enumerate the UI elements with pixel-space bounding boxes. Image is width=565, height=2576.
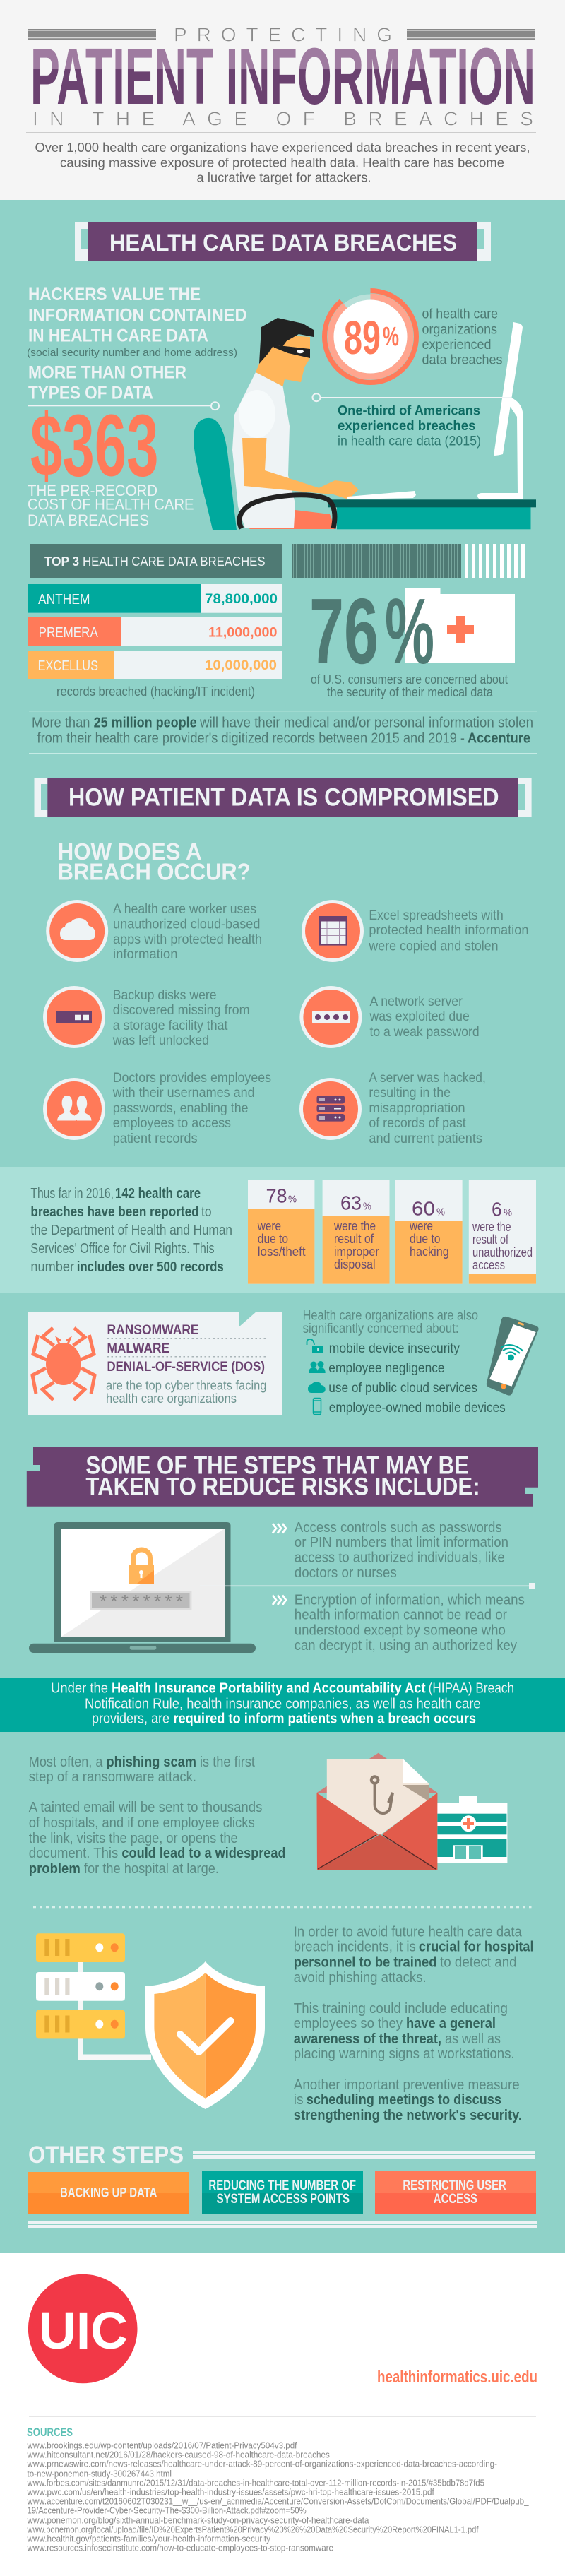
text: of health care organizations: data breaches [422,352,503,368]
text: phishing scam: of hospitals, and if one employee clicks [29,1815,255,1831]
title: protecting [28,23,535,45]
pants [249,510,335,529]
text: 142 breaches: number [30,1259,74,1275]
subheading: how does a breach occur: BREACH OCCUR? [58,858,251,884]
breach item: server hacked: A server was hacked, [369,1070,486,1086]
banner: hipaa: (HIPAA) Breach [429,1681,514,1697]
icon: chevrons [273,1595,286,1605]
stat: $363: $363 [30,397,158,494]
text: phishing scam: the link, visits the page, or opens the [29,1831,238,1846]
sources: www.pwc.com/us/en/health-industries/top-health-industry-issues/assets/pwc-hri-top-healthcare-issues-2015.pdf [27,2487,434,2498]
breach item: cloud apps: apps with protected health [113,932,262,947]
text: access controls: doctors or nurses [295,1565,397,1581]
text: one-third of americans: One-third of Americans [338,403,480,418]
subheading: how does a breach occur [58,838,251,884]
step box: reducing access points: REDUCING THE NUMBER OF [208,2178,356,2193]
breach item: shared credentials: employees to access [113,1115,231,1131]
bar: 63%: disposal [334,1257,376,1271]
hackers text block: MORE THAN OTHER [28,363,186,383]
intro text: Over 1,000 health care organizations have experienced data breaches in recent years, [35,140,530,155]
bar: 60%: % [436,1206,445,1218]
text: phishing scam: is the first [200,1755,255,1770]
step box: reducing access points [202,2171,363,2214]
panel: cyber threats: health care organizations [106,1391,237,1406]
icon: server stack [316,1096,345,1122]
breach item: backup disks: a storage facility that [113,1018,228,1033]
stat: $363: THE PER-RECORD [28,482,157,499]
icon: spreadsheet [319,916,347,946]
breach item: weak password [299,986,480,1048]
hackers text block: HACKERS VALUE THE [28,285,201,304]
breach item: shared credentials: Doctors provides employees [113,1070,271,1086]
row: anthem: ANTHEM [38,592,90,607]
breach item: cloud apps [46,900,262,962]
icon: password field [312,1011,350,1023]
bar: 63%: % [363,1201,371,1213]
sources: www.hitconsultant.net/2016/01/28/hackers-caused-98-of-healthcare-data-breaches [27,2450,330,2460]
accenture statement: will have their medical and/or personal information stolen [199,715,533,730]
title: protecting: PROTECTING [174,23,392,45]
banner: hipaa: Under the [51,1681,108,1697]
row: anthem: 78,800,000 [205,592,278,607]
text: training: strengthening the network's security. [294,2108,522,2123]
bar: 78% [248,1180,314,1284]
text: access controls: or PIN numbers that limit information [295,1535,509,1550]
text: 142 breaches: Services' Office for Civil Rights. This [30,1241,215,1257]
hair [259,318,314,364]
stat: $363: DATA BREACHES [28,511,149,529]
step box: backing up data: BACKING UP DATA [60,2186,157,2201]
icon: chevrons [273,1524,286,1533]
text: 142 breaches: 142 health care [115,1186,201,1201]
text: phishing scam [29,1755,286,1877]
bar: 63% [323,1180,390,1284]
breach item: server hacked: misappropriation [369,1100,465,1116]
table header: TOP 3 [44,554,79,569]
step box: reducing access points: SYSTEM ACCESS POINTS [217,2192,350,2207]
sources: www.ponemon.org/blog/sixth-annual-benchmark-study-on-privacy-security-of-healthcare-data [27,2515,369,2526]
stat: 76% with medical folder [309,579,515,699]
server unit [36,1972,125,2001]
text: training: have a general [406,2016,496,2031]
text: 142 breaches: Thus far in 2016, [30,1186,114,1201]
row: excellus: EXCELLUS [38,658,98,674]
letter [327,1759,429,1835]
sources [27,2426,529,2553]
text: phishing scam: for the hospital at large. [84,1861,219,1877]
icon: smartphone wifi [487,1317,539,1396]
panel: organization concerns: Health care organizations are also [303,1308,478,1323]
text: training: awareness of the threat, [294,2031,441,2047]
heading: other steps: OTHER STEPS [28,2142,184,2168]
banner: hipaa: required to inform patients when a breach occurs [173,1711,476,1727]
bar: 60%: 60 [412,1197,435,1219]
text: training: to detect and [440,1955,517,1971]
icon: spider [32,1328,95,1400]
panel: 2016 breach statistics [0,1167,565,1293]
step box: backing up data [28,2172,189,2214]
breach item: weak password: to a weak password [370,1024,480,1040]
table header [30,544,282,578]
panel: organization concerns [303,1308,539,1415]
stripe bar [292,544,525,578]
hackers text block: (social security number and home address) [27,347,237,359]
bar: 60%: due to [410,1232,441,1246]
stat: $363 [28,397,194,529]
stat: 76% with medical folder: % [385,579,434,683]
breach item: backup disks: was left unlocked [112,1033,209,1048]
banner: hipaa: providers, are [92,1711,170,1727]
bar: 60%: hacking [410,1245,449,1259]
banner: hipaa [0,1678,565,1732]
text: access controls: access to authorized individuals, like [295,1550,505,1566]
mask [272,345,310,358]
bar: 60%: were [409,1219,433,1233]
text: of health care organizations [422,307,503,368]
sleeve highlight [239,390,275,438]
bar: 78%: loss/theft [258,1245,306,1259]
text: phishing scam: problem [29,1861,81,1877]
heading: other steps [28,2142,535,2168]
panel: organization concerns: mobile device insecurity [329,1341,460,1356]
breach item: shared credentials: patient records [113,1131,198,1146]
row: excellus: 10,000,000 [205,658,277,673]
banner: hipaa: Health Insurance Portability and Accountability Act [112,1681,426,1697]
footer: uic logo [28,2274,137,2383]
bar: 6%: 6 [492,1199,502,1221]
text: 142 breaches: includes over 500 records [77,1259,224,1275]
icon: mobile small [314,1399,321,1414]
bar: 6%: result of [472,1233,509,1247]
torso [232,372,295,528]
icon: padlock [129,1550,154,1584]
text: encryption: can decrypt it, using an authorized key [295,1638,517,1654]
icon: open lock [307,1339,323,1353]
panel: cyber threats: are the top cyber threats facing [106,1377,267,1392]
bar: 6%: % [504,1207,512,1219]
text: training: crucial for hospital [419,1940,534,1955]
text: training: placing warning signs at workstations. [294,2046,515,2062]
server unit [36,2010,125,2038]
breach item: backup disks: Backup disks were [113,987,217,1003]
hackers text block: TYPES OF DATA [28,384,153,403]
text: training: This training could include educating [294,2001,508,2017]
text: 142 breaches: to [201,1204,212,1220]
breach item: weak password: A network server [370,994,463,1009]
breach item: shared credentials: passwords, enabling the [113,1100,249,1116]
text: phishing scam: step of a ransomware attack. [29,1769,196,1785]
text: 142 breaches: breaches have been reported [30,1204,199,1220]
icon: disk [56,1011,92,1023]
bar: 78%: were [257,1219,281,1233]
icon: hook [371,1776,393,1813]
table note: records breached (hacking/IT incident) [56,684,255,699]
row: premera: 11,000,000 [208,625,277,640]
text: training: Another important preventive measure [294,2077,520,2093]
text: training: breach incidents, it is [294,1940,416,1955]
hackers text block: INFORMATION CONTAINED [28,305,247,325]
title: in the age of breaches: IN THE AGE OF BREACHES [32,107,533,129]
text: phishing scam: Most often, a [29,1755,103,1770]
heading: how patient data is compromised [34,778,532,817]
bar: 78%: 78 [266,1185,287,1207]
panel: cyber threats: RANSOMWARE [107,1323,199,1338]
bar: 63%: result of [334,1232,374,1246]
intro text [35,140,530,185]
bar: 6%: unauthorized [472,1245,533,1259]
breach item: weak password: was exploited due [369,1009,470,1024]
face [256,336,310,386]
callout connector left [28,402,219,410]
table header: HEALTH CARE DATA BREACHES [83,554,266,569]
breach item: server hacked: and current patients [369,1131,482,1146]
sources: www.ponemon.org/local/upload/file/ID%20ExpertsPatient%20Privacy%20%26%20Data%20Security%20Report%20FINAL1-1.pdf [27,2524,479,2535]
text: training [294,1925,534,2123]
breach item: shared credentials [43,1070,271,1146]
envelope [316,1793,437,1870]
sources: www.forbes.com/sites/danmunro/2015/12/31/data-breaches-in-healthcare-total-over-112-million-records-in-2015/#35bdb78d7fd5 [27,2478,484,2488]
hackers text block: IN HEALTH CARE DATA [28,326,208,346]
panel: organization concerns: use of public cloud services [328,1381,477,1396]
breach item: excel spreadsheets: Excel spreadsheets with [369,908,504,923]
illustration: hacker at computer [194,318,536,530]
intro text: a lucrative target for attackers. [196,170,371,185]
icon: shield [145,1961,265,2109]
text: training: as well as [445,2031,501,2047]
icon: medical folder [405,588,515,663]
heading: steps to reduce risks: SOME OF THE STEPS THAT MAY BE [85,1452,469,1480]
text: one-third of americans: in health care data (2015) [338,434,481,449]
heading: health care data breaches: HEALTH CARE DATA BREACHES [109,230,457,256]
breach item: cloud apps: information [113,946,178,962]
text: 142 breaches: the Department of Health and Human [30,1223,232,1238]
heading: health care data breaches [75,222,491,261]
panel: cyber threats: DENIAL-OF-SERVICE (DOS) [107,1360,265,1375]
text: one-third of americans [338,403,481,449]
panel: cyber threats [28,1312,282,1415]
text: phishing scam: phishing scam [106,1755,196,1770]
text: training: scheduling meetings to discuss [307,2092,501,2108]
text: one-third of americans: experienced breaches [338,418,476,434]
bar: 6%: were the [472,1220,511,1234]
text: of health care organizations: experienced [422,337,492,352]
monitor [477,322,523,499]
sources: to-new-ponemon-study-300267443.html [27,2469,172,2479]
breach item: excel spreadsheets: were copied and stolen [368,938,499,954]
text: training: personnel to be trained [294,1955,436,1971]
step box: restricting user access: ACCESS [434,2192,477,2207]
accenture statement: 25 million people [94,715,197,730]
breach item: server hacked: of records of past [369,1115,466,1131]
row: premera: PREMERA [39,625,98,641]
sources: www.brookings.edu/wp-content/uploads/2016/07/Patient-Privacy504v3.pdf [27,2440,297,2451]
text: of health care organizations: organizations [422,322,497,338]
breach item: server hacked: resulting in the [369,1085,451,1100]
chair back [194,418,237,530]
desk [328,499,536,529]
subheading: how does a breach occur: HOW DOES A [58,838,202,865]
breach item: backup disks: discovered missing from [113,1002,250,1018]
text: phishing scam: A tainted email will be sent to thousands [29,1800,262,1815]
heading: how patient data is compromised: HOW PATIENT DATA IS COMPROMISED [69,784,499,812]
text: access controls: Access controls such as passwords [295,1520,502,1536]
stat: $363: COST OF HEALTH CARE [28,496,194,514]
bar: 60% [396,1180,463,1284]
breach item: excel spreadsheets [302,900,528,962]
header panel [0,0,565,200]
icon: cloud [60,918,95,940]
password field: ******** [100,1591,183,1612]
bar: 6% [469,1180,536,1284]
stat: 76% with medical folder: of U.S. consumers are concerned about [311,672,508,687]
chair arm [239,495,335,528]
stat: 89% ring: % [383,322,399,352]
icon: cloud small [308,1382,326,1393]
panel: organization concerns: employee negligence [328,1361,445,1376]
sources: www.healthit.gov/patients-families/your-health-information-security [27,2534,270,2544]
illustration: servers and shield [36,1933,265,2109]
text: phishing scam: document. This [29,1846,118,1861]
connector line [200,1583,535,1589]
breach item: excel spreadsheets: protected health information [369,922,528,938]
accenture statement: Accenture [468,731,530,747]
icon: employees [309,1361,326,1373]
intro text: causing massive exposure of protected health data. Health care has become [60,155,504,170]
keyboard [347,491,416,499]
arm [242,438,359,499]
panel: organization concerns: employee-owned mobile devices [329,1401,506,1415]
bar: 78%: due to [258,1232,288,1246]
stat: 89% ring: 89 [344,311,381,364]
illustration: laptop with lock [29,1522,256,1653]
accenture statement: More than [32,715,90,730]
panel: organization concerns: significantly concerned about: [303,1322,459,1336]
bar: 6%: access [472,1258,505,1272]
sources: SOURCES [27,2426,73,2439]
text: encryption: health information cannot be read or [295,1608,507,1623]
bar: 63%: were the [333,1219,376,1233]
table: top 3 breaches [28,544,282,699]
stat: 76% with medical folder: the security of their medical data [327,685,494,699]
text: 142 breaches [30,1186,232,1275]
step box: restricting user access: RESTRICTING USER [403,2178,506,2193]
stat: 89% ring [325,291,417,383]
icon: hospital [437,1796,507,1863]
footer: uic logo: UIC [39,2301,128,2360]
bar: 63%: 63 [340,1192,362,1214]
bar: 63%: improper [334,1245,379,1259]
callout connector right [312,393,511,401]
stat: 76% with medical folder: 76 [309,579,379,683]
text: training: In order to avoid future health care data [294,1925,523,1940]
breach item: shared credentials: with their usernames and [112,1085,255,1100]
breach item: backup disks [43,986,250,1048]
accenture statement [29,711,537,754]
text: of health care organizations: of health care [422,307,498,322]
text: training: is [294,2092,304,2108]
text: phishing scam: could lead to a widespread [121,1846,286,1861]
text: access controls [273,1520,509,1581]
row: anthem [28,584,282,613]
text: encryption: understood except by someone who [295,1623,506,1639]
row: excellus [28,651,282,679]
heading: steps to reduce risks [27,1447,538,1507]
row: premera [28,617,282,646]
sources: 19/Accenture-Provider-Cyber-Security-The-$300-Billion-Attack.pdf#zoom=50% [27,2505,307,2516]
icon: people [57,1096,92,1120]
text: training: employees so they [294,2016,403,2031]
heading: steps to reduce risks: TAKEN TO REDUCE RISKS INCLUDE: [85,1473,480,1500]
banner: hipaa: Notification Rule, health insurance companies, as well as health care [85,1696,481,1711]
step box: restricting user access [375,2171,536,2214]
breach item: server hacked [299,1070,486,1146]
text: training: avoid phishing attacks. [294,1970,427,1986]
breach item: cloud apps: unauthorized cloud-based [113,917,260,932]
teal background panel [0,200,565,2253]
text: encryption [273,1593,525,1654]
accenture statement: from their health care provider's digitized records between 2015 and 2019 - [37,731,465,747]
hackers text block [27,285,247,403]
text: encryption: Encryption of information, which means [295,1593,525,1608]
sources: www.resources.infosecinstitute.com/how-to-educate-employees-to-stop-ransomware [27,2543,333,2553]
illustration: phishing email [316,1753,507,1870]
bar: 78%: % [288,1194,297,1206]
panel: cyber threats: MALWARE [107,1341,170,1356]
server unit [36,1933,125,1962]
envelope flap [316,1753,437,1793]
breach item: cloud apps: A health care worker uses [113,901,256,917]
sources: www.prnewswire.com/news-releases/healthcare-under-attack-89-percent-of-organizations-experienced-data-breaches-according- [27,2459,497,2469]
